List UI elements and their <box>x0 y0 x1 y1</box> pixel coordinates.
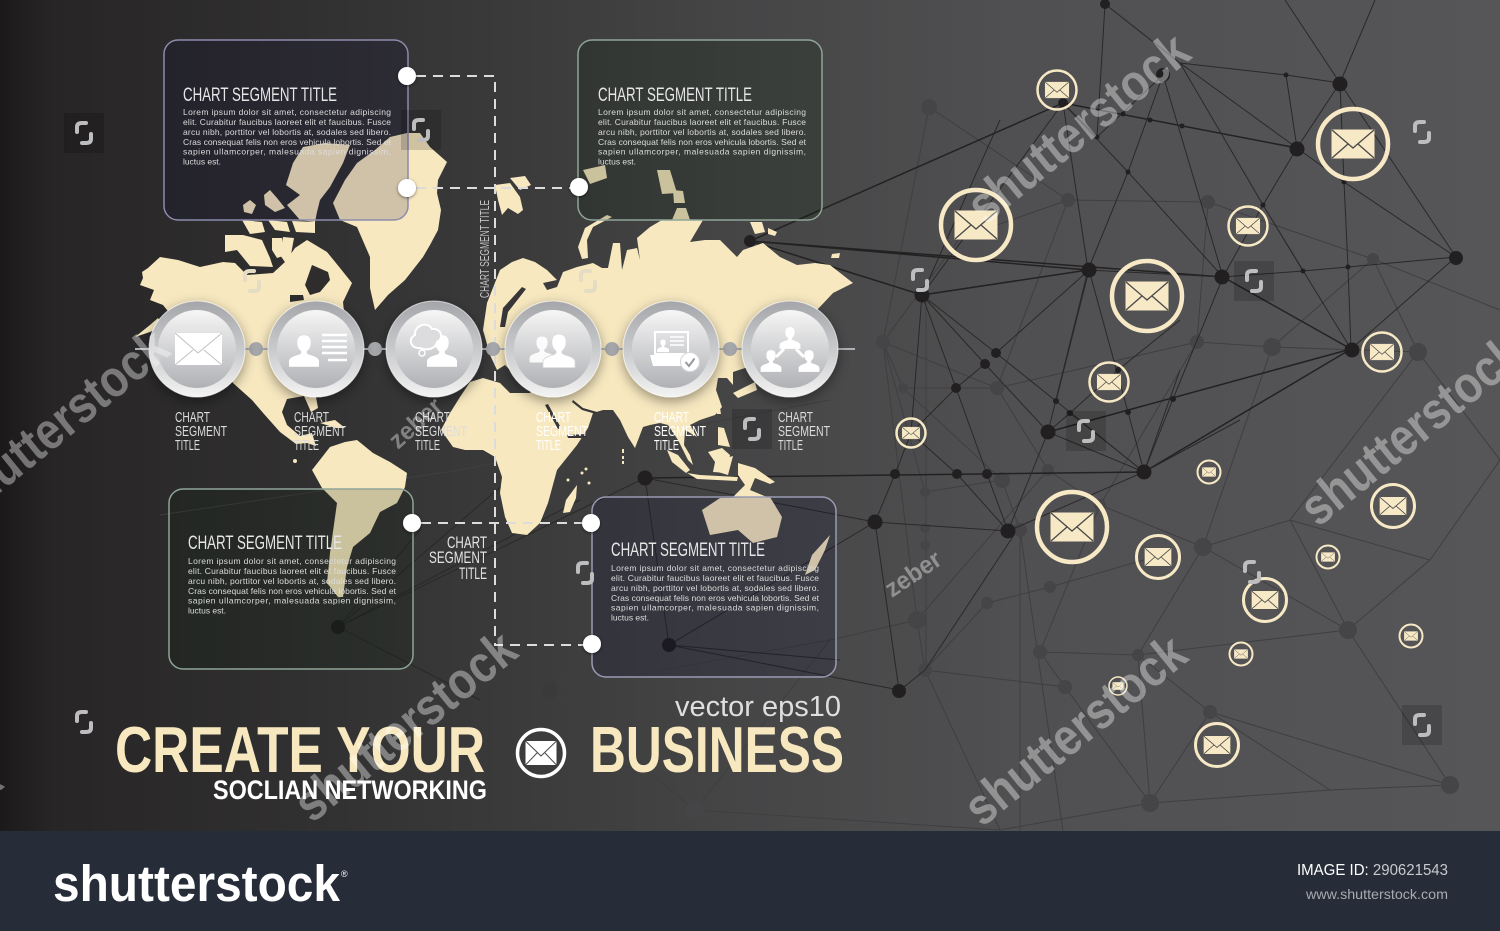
title: business: BUSINESS <box>590 713 844 786</box>
panel body text <box>188 556 397 616</box>
icon: envelope large 3 <box>1318 109 1388 179</box>
icon: envelope large 4 <box>1037 492 1107 562</box>
label 3: TITLE <box>415 437 440 454</box>
icon: envelope medium 4 <box>1362 332 1402 372</box>
panel body text: elit. Curabitur faucibus laoreet elit et faucibus. Fusce <box>611 573 819 583</box>
icon: envelope <box>175 333 222 365</box>
envelope node icons <box>896 70 1422 766</box>
mark box 3 <box>1234 261 1274 301</box>
panel heading: CHART SEGMENT TITLE <box>598 85 752 106</box>
icon: person with thought cloud <box>411 325 457 367</box>
right aligned label: CHART <box>447 534 487 552</box>
panel body text: Cras consequat felis non eros vehicula lobortis. Sed et <box>188 586 397 596</box>
connector dots <box>398 67 601 653</box>
faint background network <box>160 99 1500 831</box>
mark plain 6 <box>245 271 259 291</box>
panel heading: CHART SEGMENT TITLE <box>611 540 765 561</box>
panel body text: arcu nibh, porttitor vel lobortis at, sodales sed libero. <box>188 576 396 586</box>
label 6: SEGMENT <box>778 423 830 440</box>
panel body text: luctus est. <box>598 156 636 166</box>
vertical label: CHART SEGMENT TITLE <box>478 200 492 298</box>
panel body text: sapien ullamcorper, malesuada sapien dignissim, <box>183 146 391 156</box>
label 5 <box>654 409 706 454</box>
panel body text: Lorem ipsum dolor sit amet, consectetur adipiscing <box>188 556 396 566</box>
panel body text: sapien ullamcorper, malesuada sapien dignissim, <box>611 602 819 612</box>
mark box 6 <box>1402 705 1442 745</box>
panel body text: elit. Curabitur faucibus laoreet elit et faucibus. Fusce <box>188 566 396 576</box>
mark plain 3 <box>913 270 927 290</box>
mark box 1 <box>64 113 104 153</box>
icon: envelope large 2 <box>1112 261 1182 331</box>
panel body text: Lorem ipsum dolor sit amet, consectetur adipiscing <box>611 563 819 573</box>
mark box 2 <box>401 110 441 150</box>
icon: profile with list <box>289 335 347 367</box>
timeline connector <box>135 342 855 356</box>
panel body text: arcu nibh, porttitor vel lobortis at, sodales sed libero. <box>598 127 806 137</box>
mark plain 4 <box>578 563 592 583</box>
label 4: CHART <box>536 409 571 426</box>
label 1: TITLE <box>175 437 200 454</box>
panel body text: Lorem ipsum dolor sit amet, consectetur adipiscing <box>183 107 391 117</box>
icon: envelope medium 5 <box>1136 536 1180 578</box>
panel body text: elit. Curabitur faucibus laoreet elit et faucibus. Fusce <box>183 117 391 127</box>
icon: envelope medium 8 <box>1196 724 1238 766</box>
label 6: CHART <box>778 409 813 426</box>
dark network graph <box>331 0 1463 700</box>
label 1: SEGMENT <box>175 423 227 440</box>
label 5: CHART <box>654 409 689 426</box>
panel body text: luctus est. <box>183 156 221 166</box>
label 6 <box>778 409 830 454</box>
mark plain 7 <box>581 271 595 291</box>
panel body text: arcu nibh, porttitor vel lobortis at, sodales sed libero. <box>611 583 819 593</box>
footer bar <box>0 831 1500 931</box>
contributor watermark 1: zeber <box>880 545 947 603</box>
icon: title envelope <box>518 730 564 776</box>
watermark bottom right: shutterstock <box>953 624 1198 837</box>
label 2: SEGMENT <box>294 423 346 440</box>
small chart segment labels <box>175 409 830 454</box>
label 4: TITLE <box>536 437 561 454</box>
footer url: www.shutterstock.com <box>1305 886 1448 902</box>
label 6: TITLE <box>778 437 803 454</box>
footer logo: shutterstock <box>53 855 341 912</box>
label 2 <box>294 409 346 454</box>
panel body text: elit. Curabitur faucibus laoreet elit et faucibus. Fusce <box>598 117 806 127</box>
icon: envelope medium 3 <box>1090 362 1128 402</box>
step 5: laptop circle <box>623 301 719 397</box>
step 2: profile circle <box>268 301 364 397</box>
step 3: chat circle <box>386 301 482 397</box>
icon: laptop with check <box>650 332 700 372</box>
panel body text <box>183 107 392 166</box>
icon: envelope small 4 <box>1230 642 1252 666</box>
label 3: CHART <box>415 409 450 426</box>
panel body text <box>598 107 807 166</box>
vector eps label: vector eps10 <box>675 691 841 723</box>
step 4: group circle <box>505 301 601 397</box>
watermark centre: shutterstock <box>283 620 528 833</box>
panel body text: arcu nibh, porttitor vel lobortis at, sodales sed libero. <box>183 127 391 137</box>
label 1 <box>175 409 227 454</box>
label 2: CHART <box>294 409 329 426</box>
right aligned label: SEGMENT <box>429 549 487 567</box>
subtitle: social networking: SOCLIAN NETWORKING <box>213 775 487 805</box>
icon: envelope medium 6 <box>1372 484 1414 528</box>
panel body text: Cras consequat felis non eros vehicula lobortis. Sed et <box>598 137 807 147</box>
panel body text: luctus est. <box>611 612 649 622</box>
dashed connectors <box>416 76 584 645</box>
right aligned label: TITLE <box>459 565 487 583</box>
contributor watermark 2: zeber <box>383 392 448 454</box>
panel heading: CHART SEGMENT TITLE <box>183 85 337 106</box>
watermark marks <box>64 110 1442 745</box>
mark plain 2 <box>77 712 91 732</box>
step 1: mail circle <box>149 301 245 397</box>
icon: envelope medium 7 <box>1244 578 1286 622</box>
right aligned label <box>429 534 487 583</box>
panel body text: Cras consequat felis non eros vehicula lobortis. Sed et <box>183 137 392 147</box>
label 1: CHART <box>175 409 210 426</box>
panel body text <box>611 563 820 622</box>
label 5: SEGMENT <box>654 423 706 440</box>
seas on map <box>237 258 597 438</box>
panel body text: Lorem ipsum dolor sit amet, consectetur adipiscing <box>598 107 806 117</box>
panel body text: sapien ullamcorper, malesuada sapien dignissim, <box>598 146 806 156</box>
step 6: hierarchy circle <box>742 301 838 397</box>
icon: envelope medium 1 <box>1038 70 1076 110</box>
label 4: SEGMENT <box>536 423 588 440</box>
panel: chart segment bottom left <box>169 489 413 669</box>
icon: envelope small 1 <box>896 418 926 448</box>
panel body text: sapien ullamcorper, malesuada sapien dignissim, <box>188 596 396 606</box>
mark box 5 <box>732 409 772 449</box>
icon: envelope medium 2 <box>1228 206 1268 246</box>
footer logo registered mark: ® <box>341 869 348 879</box>
panel body text: luctus est. <box>188 606 226 616</box>
label 3 <box>415 409 467 454</box>
icon: hierarchy of people <box>761 327 819 372</box>
icon: envelope small 3 <box>1316 546 1340 568</box>
panel heading: CHART SEGMENT TITLE <box>188 533 342 554</box>
icon: envelope large 1 <box>941 190 1011 260</box>
label 3: SEGMENT <box>415 423 467 440</box>
image id: IMAGE ID: 290621543 <box>1297 862 1448 879</box>
mark plain 5 <box>1245 562 1259 582</box>
icon: two people <box>530 334 575 368</box>
icon: envelope small 5 <box>1400 624 1422 648</box>
world map <box>135 133 853 597</box>
panel: chart segment bottom right <box>592 497 836 677</box>
mark box 4 <box>1066 411 1106 451</box>
label 4 <box>536 409 588 454</box>
panel: chart segment top left <box>164 40 408 220</box>
icon: envelope small 6 <box>1109 677 1127 695</box>
panel: chart segment top right <box>578 40 822 220</box>
label 2: TITLE <box>294 437 319 454</box>
panel body text: Cras consequat felis non eros vehicula lobortis. Sed et <box>611 593 820 603</box>
mark plain 1 <box>1415 122 1429 142</box>
label 5: TITLE <box>654 437 679 454</box>
title: create your: CREATE YOUR <box>115 713 485 786</box>
watermark top: shutterstock <box>956 22 1201 235</box>
icon: envelope small 2 <box>1198 460 1220 484</box>
